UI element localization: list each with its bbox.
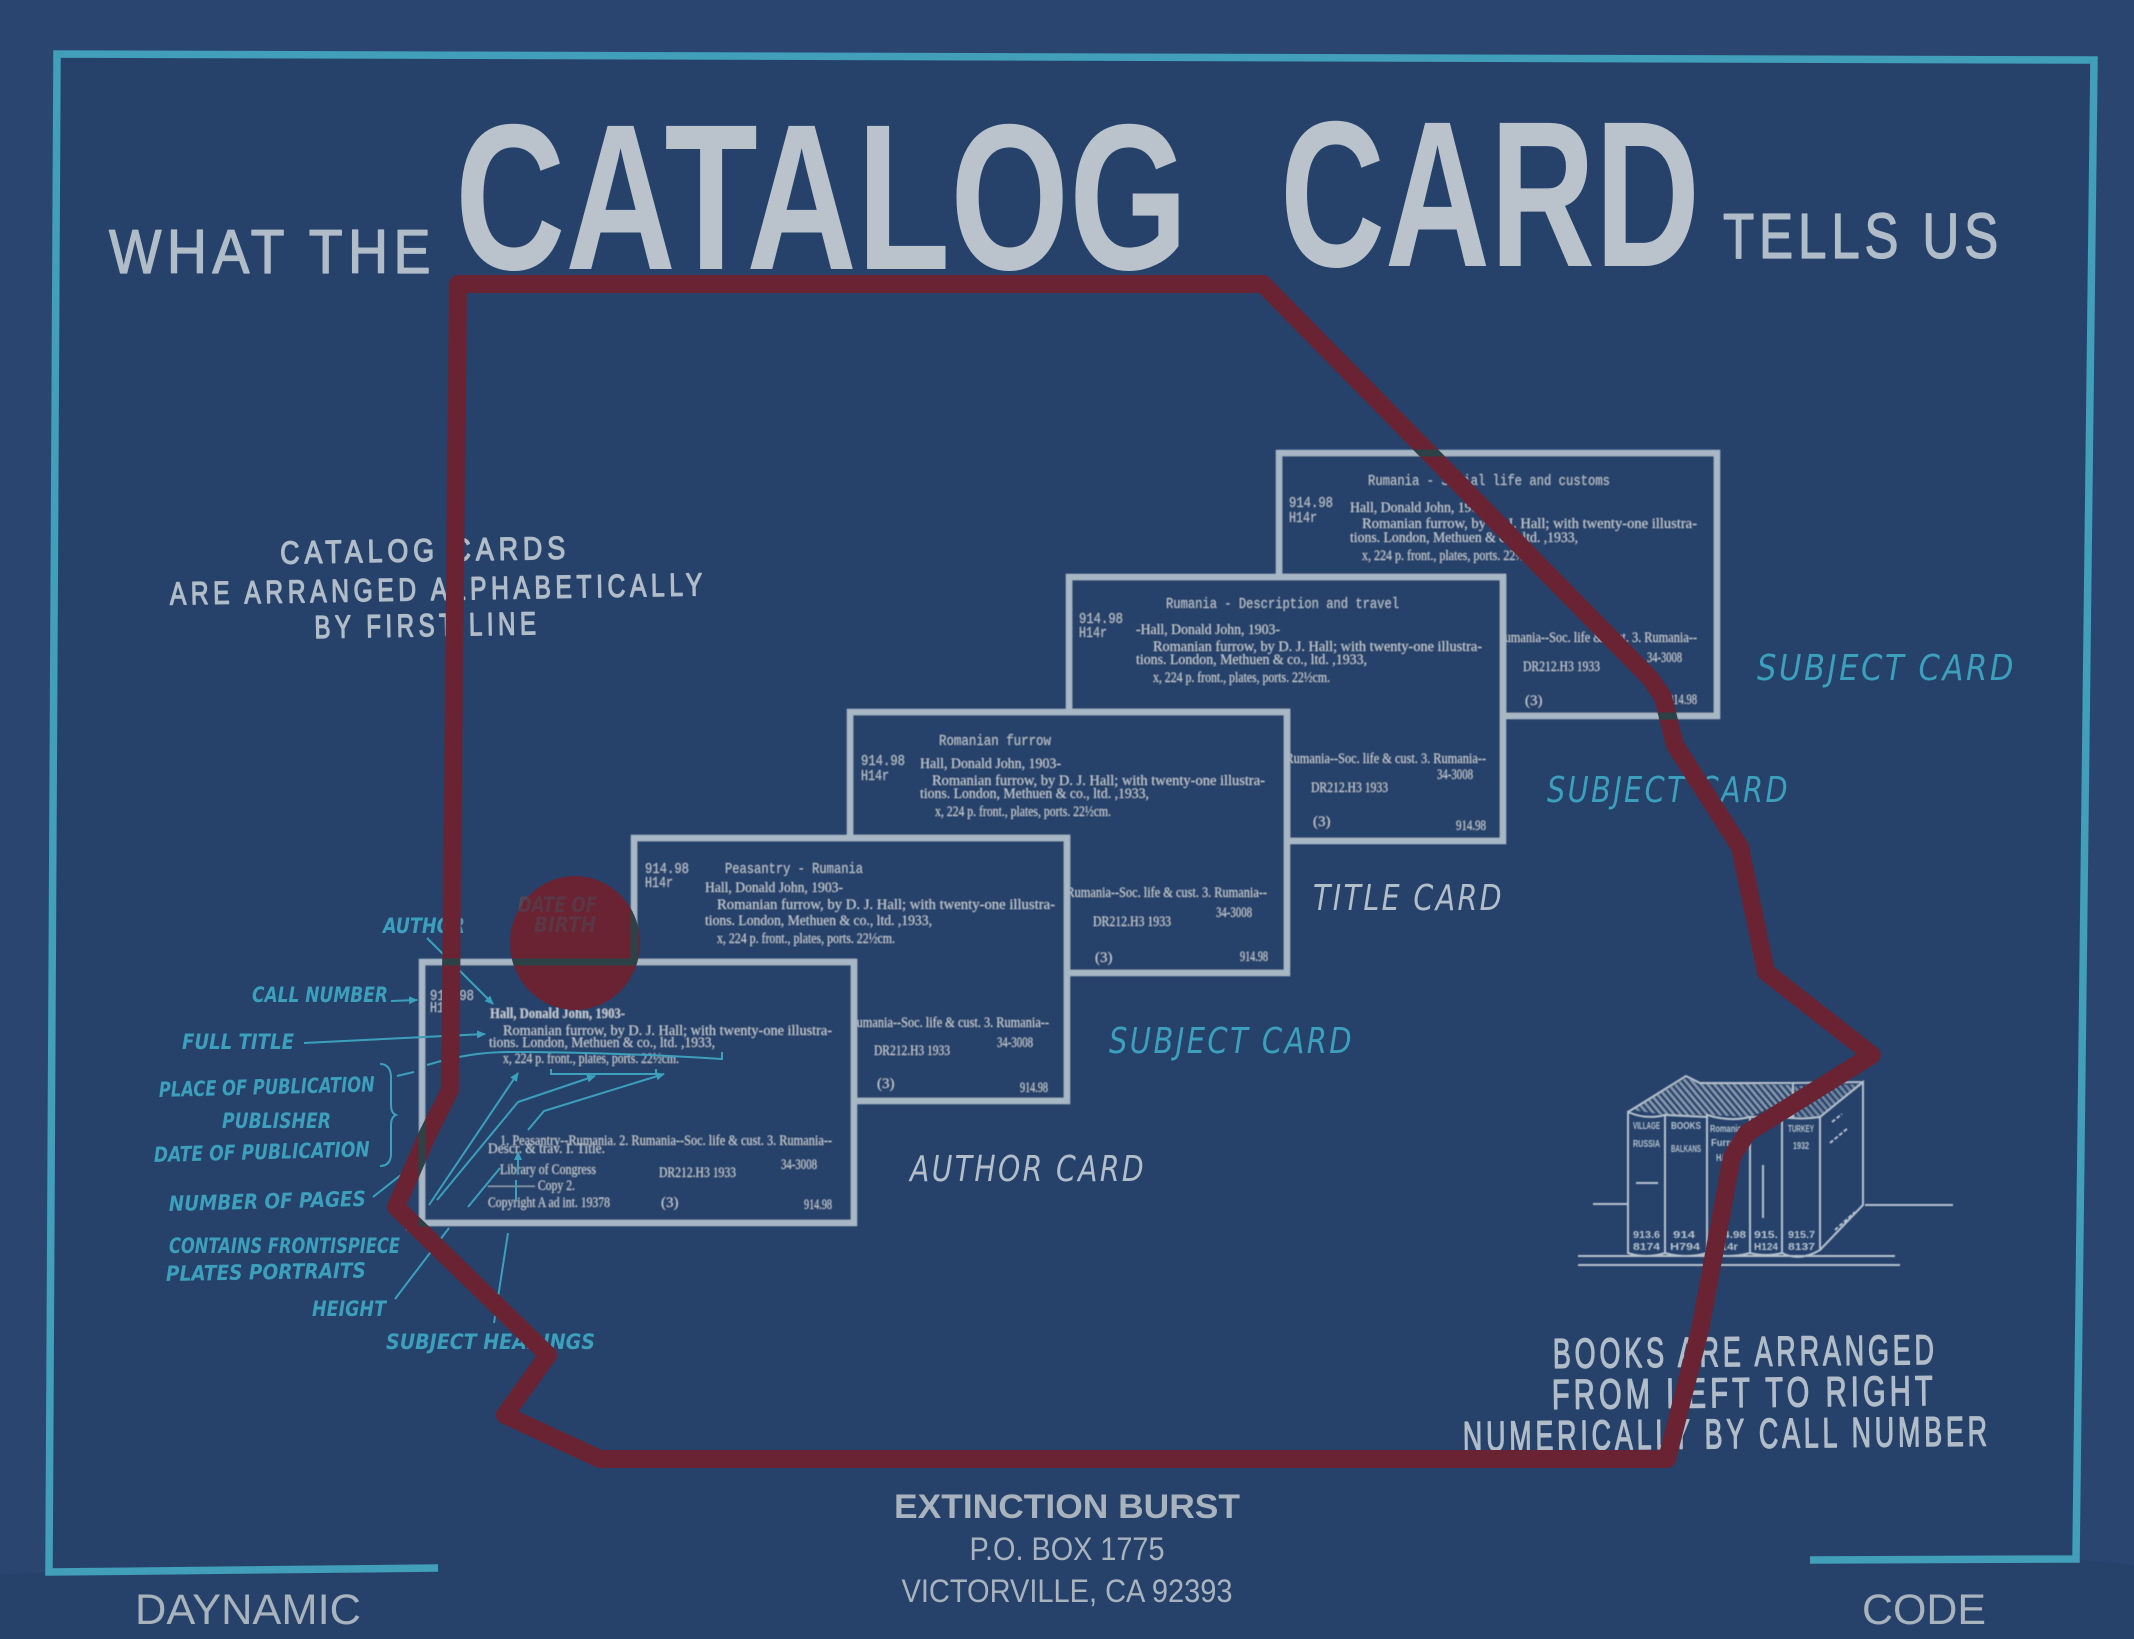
icon: row of books on a shelf: Romanian [1710,1124,1746,1135]
card 4: subject card, description and travel: H14r [1079,625,1107,642]
icon: row of books on a shelf: BALKANS [1671,1144,1701,1155]
date of birth label through red circle: BIRTH [534,913,596,937]
card 2: subject card, peasantry: 914.98 [1020,1080,1048,1096]
card 1: author card: x, 224 p. front., plates, ports. 22½cm. [503,1051,679,1067]
icon: row of books on a shelf: 913.6 [1633,1230,1660,1241]
left annotation labels: CONTAINS FRONTISPIECE [169,1234,401,1258]
title [109,79,2003,314]
annotation arrows and leader lines [304,937,722,1323]
footer: extinction burst address: VICTORVILLE, CA 92393 [902,1573,1232,1609]
icon: row of books on a shelf: RUSSIA [1633,1139,1660,1150]
card 1: author card: Romanian furrow, by D. J. Hall; with twenty-one illustra- [503,1023,832,1039]
title: card: CARD [1280,79,1700,311]
left annotation labels: PLACE OF PUBLICATION [159,1072,375,1102]
left annotation labels: AUTHOR [381,914,465,938]
note: catalog cards arranged alphabetically: ARE ARRANGED ALPHABETICALLY [170,566,707,612]
icon: row of books on a shelf: 915.7 [1788,1230,1815,1241]
card 3: title card: 914.98 [861,753,905,770]
card 1: author card: 914.98 [804,1197,832,1213]
note: books arranged numerically: FROM LEFT TO RIGHT [1552,1367,1937,1418]
card 5: subject card, social life and customs: 914.98 [1668,692,1697,708]
icon: row of books on a shelf: VILLAGE [1633,1121,1660,1132]
card 4: subject card, description and travel: 914.98 [1456,818,1486,834]
card 5: subject card, social life and customs [1279,453,1717,716]
card 4: subject card, description and travel: (3) [1313,814,1330,830]
card 1: author card: Hall, Donald John, 1903- [490,1006,625,1022]
icon: row of books on a shelf: 914.98 [1710,1230,1747,1241]
left annotation labels [154,893,598,1354]
card 4: subject card, description and travel: 1. Peasantry--Rumania. 2. Rumania--Soc. life & cust. 3. Rumania-- [1154,751,1486,767]
red overlay circle [510,876,640,1010]
card stack [422,453,1717,1223]
left annotation labels: DATE OF [518,893,598,917]
card 5: subject card, social life and customs: Rumania - Social life and customs [1368,473,1610,490]
card 5: subject card, social life and customs: 34-3008 [1647,650,1682,666]
footer: extinction burst address: EXTINCTION BURST [894,1488,1240,1526]
icon: row of books on a shelf: TURKEY [1788,1124,1814,1135]
card 1: author card [422,962,854,1223]
label: subject card (description): SUBJECT CARD [1547,770,1790,811]
card 5: subject card, social life and customs: 914.98 [1289,495,1333,512]
red overlay outline [396,284,1872,1459]
footer: extinction burst address [894,1488,1240,1609]
left annotation labels: HEIGHT [312,1297,387,1321]
label: subject card (social life): SUBJECT CARD [1757,648,2016,689]
card 3: title card: 1. Peasantry--Rumania. 2. Rumania--Soc. life & cust. 3. Rumania-- [935,885,1267,901]
note: catalog cards arranged alphabetically: CATALOG CARDS [280,530,570,571]
card 4: subject card, description and travel: -Hall, Donald John, 1903- [1136,622,1280,638]
card 4: subject card, description and travel: tions. London, Methuen & co., ltd. ,1933, [1136,652,1367,668]
card 2: subject card, peasantry: Peasantry - Rumania [725,861,863,878]
icon: row of books on a shelf: 914 [1673,1230,1696,1241]
card 4: subject card, description and travel: Rumania - Description and travel [1166,596,1399,613]
footer: code: CODE [1862,1586,1986,1634]
note: books arranged numerically [1463,1326,1991,1460]
footer: daynamic: DAYNAMIC [135,1586,361,1634]
card 5: subject card, social life and customs: Hall, Donald John, 1903- [1350,500,1490,516]
card 2: subject card, peasantry: Romanian furrow, by D. J. Hall; with twenty-one illustra- [717,897,1055,913]
icon: row of books on a shelf: H124 [1754,1242,1778,1253]
icon: row of books on a shelf: BOOKS [1671,1121,1701,1132]
card 2: subject card, peasantry: H14r [645,875,673,892]
card 2: subject card, peasantry: 1. Peasantry--Rumania. 2. Rumania--Soc. life & cust. 3. Rumania-- [717,1015,1049,1031]
card 5: subject card, social life and customs: 1. Peasantry--Rumania. 2. Rumania--Soc. life & cust. 3. Rumania-- [1365,630,1697,646]
label: author card: AUTHOR CARD [908,1149,1146,1190]
card 2: subject card, peasantry: DR212.H3 1933 [874,1043,950,1059]
card 5: subject card, social life and customs: H14r [1289,510,1317,527]
icon: row of books on a shelf: 915. [1754,1230,1778,1241]
card 1: author card: 1. Peasantry--Rumania. 2. Rumania--Soc. life & cust. 3. Rumania-- [500,1133,832,1149]
date of birth label through red circle: DATE OF [518,893,598,917]
icon: row of books on a shelf: H14r [1712,1242,1738,1253]
card 5: subject card, social life and customs: x, 224 p. front., plates, ports. 22½cm. [1362,548,1542,564]
card 3: title card: Romanian furrow [939,733,1051,750]
footer: extinction burst address: P.O. BOX 1775 [970,1531,1164,1567]
icon: row of books on a shelf: 8174 [1633,1242,1661,1253]
card 4: subject card, description and travel [1069,577,1503,841]
card 3: title card: H14r [861,768,889,785]
left annotation labels: PUBLISHER [222,1109,331,1133]
card 1: author card: tions. London, Methuen & co., ltd. ,1933, [489,1035,715,1051]
card 3: title card: tions. London, Methuen & co., ltd. ,1933, [920,786,1149,802]
card 3: title card: Romanian furrow, by D. J. Hall; with twenty-one illustra- [932,773,1265,789]
card 3: title card: Hall, Donald John, 1903- [920,756,1061,772]
left annotation labels: NUMBER OF PAGES [169,1187,366,1216]
title: tells us: TELLS US [1723,200,2003,272]
card 4: subject card, description and travel: DR212.H3 1933 [1311,780,1388,796]
card 1: author card: ———— Copy 2. [487,1178,575,1194]
card 1: author card: H14r [430,1000,458,1017]
title: what the: WHAT THE [109,218,436,287]
left annotation labels: FULL TITLE [182,1030,295,1054]
left annotation labels: DATE OF PUBLICATION [154,1137,370,1167]
card 4: subject card, description and travel: x, 224 p. front., plates, ports. 22½cm. [1153,670,1330,686]
card 3: title card: 914.98 [1240,949,1268,965]
icon: row of books on a shelf: 8137 [1788,1242,1816,1253]
card 3: title card: x, 224 p. front., plates, ports. 22½cm. [935,804,1111,820]
card 1: author card: Copyright A ad int. 19378 [488,1195,610,1211]
card 2: subject card, peasantry: Hall, Donald John, 1903- [705,880,843,896]
card 2: subject card, peasantry: 34-3008 [997,1035,1033,1051]
icon: row of books on a shelf: 1932 [1793,1141,1809,1152]
card 4: subject card, description and travel: 914.98 [1079,611,1123,628]
note: catalog cards arranged alphabetically: BY FIRST LINE [314,605,541,645]
card 2: subject card, peasantry: tions. London, Methuen & co., ltd. ,1933, [705,913,932,929]
card 2: subject card, peasantry: 914.98 [645,861,689,878]
icon: row of books on a shelf [1578,1076,1953,1265]
card 2: subject card, peasantry: x, 224 p. front., plates, ports. 22½cm. [717,931,895,947]
icon: row of books on a shelf: H794 [1670,1242,1701,1253]
card 1: author card: 914.98 [430,988,474,1005]
label: subject card (peasantry): SUBJECT CARD [1109,1021,1354,1062]
label: title card: TITLE CARD [1313,878,1504,919]
left annotation labels: BIRTH [534,913,596,937]
note: catalog cards arranged alphabetically [169,527,708,648]
card 1: author card: 34-3008 [781,1157,817,1173]
card 3: title card [850,712,1287,973]
icon: row of books on a shelf: Furrow [1711,1138,1743,1149]
card 3: title card: (3) [1095,950,1112,966]
card 3: title card: 34-3008 [1216,905,1252,921]
card 1: author card: DR212.H3 1933 [659,1165,736,1181]
card 3: title card: DR212.H3 1933 [1093,914,1171,930]
card 5: subject card, social life and customs: (3) [1525,693,1542,709]
date of birth label through red circle [518,893,598,937]
card 2: subject card, peasantry: (3) [877,1076,894,1092]
card 4: subject card, description and travel: Romanian furrow, by D. J. Hall; with twenty-one illustra- [1153,639,1482,655]
card 1: author card: (3) [661,1195,678,1211]
left annotation labels: PLATES PORTRAITS [166,1259,366,1286]
card 4: subject card, description and travel: 34-3008 [1437,767,1473,783]
card 5: subject card, social life and customs: Romanian furrow, by D. J. Hall; with twenty-one illustra- [1362,516,1697,532]
card 2: subject card, peasantry [634,838,1067,1101]
card 1: author card: Library of Congress [500,1162,596,1178]
left annotation labels: SUBJECT HEADINGS [386,1330,595,1354]
left annotation labels: CALL NUMBER [252,983,388,1007]
card 5: subject card, social life and customs: tions. London, Methuen & co., ltd. ,1933, [1350,530,1578,546]
card 1: author card: Descr. & trav. I. Title. [488,1141,605,1157]
card type labels [908,648,2016,1190]
icon: row of books on a shelf: HALL [1716,1153,1736,1164]
card 5: subject card, social life and customs: DR212.H3 1933 [1523,659,1600,675]
title: catalog: CATALOG [455,82,1188,314]
card border segments darkened under overlay [422,453,1717,1265]
